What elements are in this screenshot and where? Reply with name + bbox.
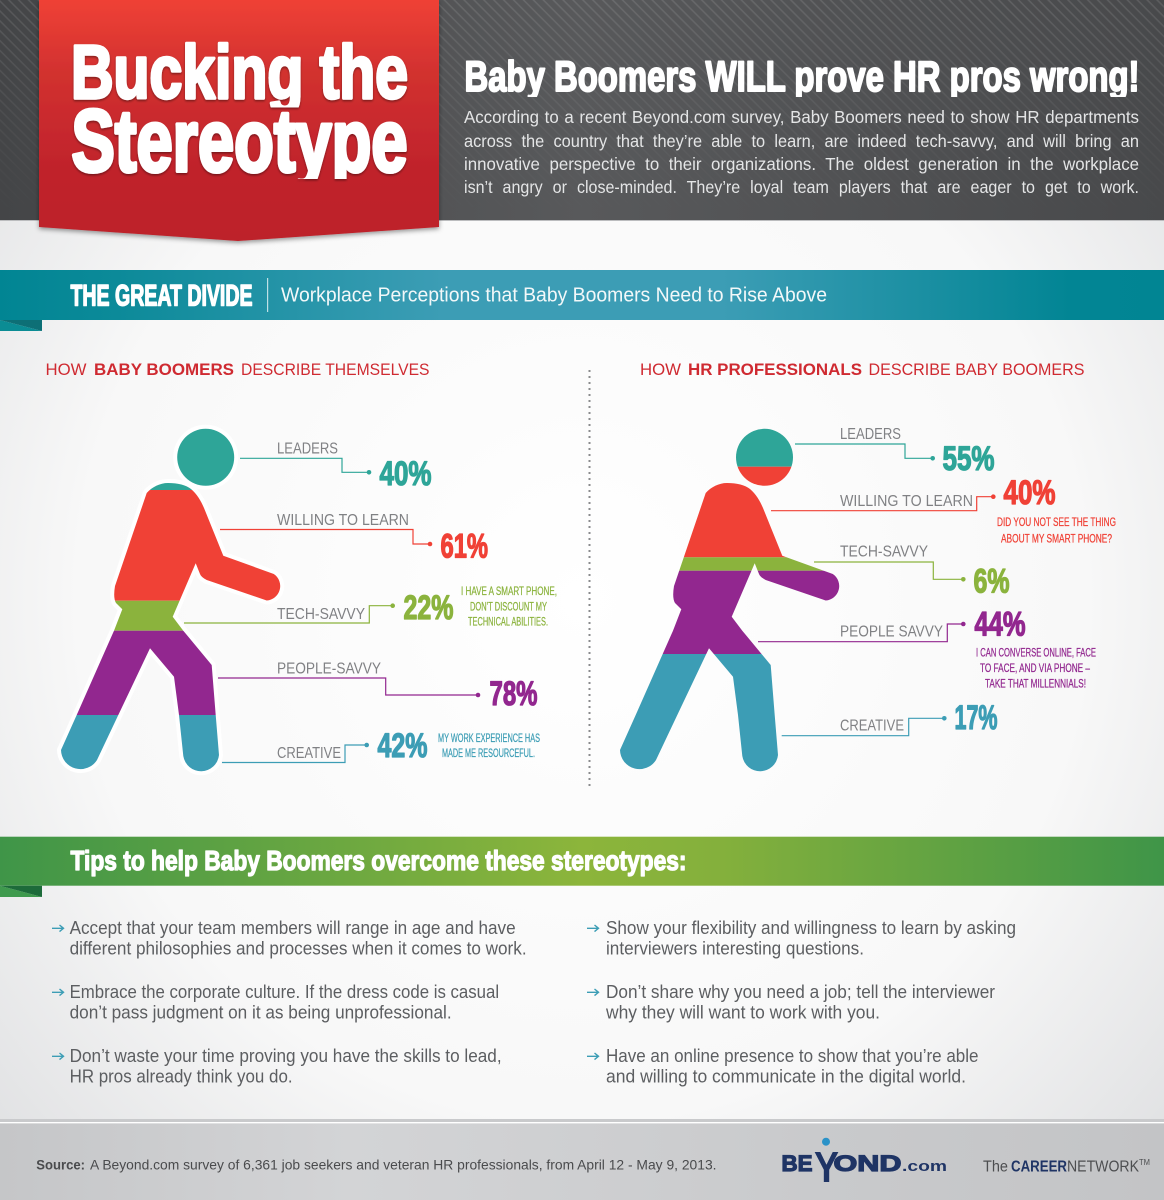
- callout: willing to learn 61%: 61%: [440, 527, 488, 565]
- callout: tech-savvy 22%: I HAVE A SMART PHONE,: [461, 584, 557, 598]
- tip 1: Accept that your team members will range in age and have: [70, 917, 516, 938]
- intro paragraph: innovative perspective to their organizations. The oldest generation in the workplace: [464, 154, 1139, 174]
- tips heading: Tips to help Baby Boomers overcome these stereotypes:: [70, 845, 686, 876]
- callout: willing to learn 40%: WILLING TO LEARN: [840, 493, 973, 510]
- logo: Beyond.com: OND: [834, 1151, 902, 1176]
- tip 2: [52, 981, 499, 1022]
- callout: creative 42%: MY WORK EXPERIENCE HAS: [438, 731, 540, 745]
- tip 6: and willing to communicate in the digital world.: [606, 1065, 966, 1086]
- callout: tech-savvy 22%: TECHNICAL ABILITIES.: [468, 615, 548, 629]
- left figure: boomers self-description: [57, 428, 280, 773]
- callout: people savvy 44%: I CAN CONVERSE ONLINE, FACE: [976, 646, 1096, 660]
- callout: willing to learn 40%: 40%: [1004, 474, 1056, 512]
- callout: tech-savvy 22%: 22%: [404, 589, 454, 627]
- callout: creative 42%: CREATIVE: [277, 745, 341, 762]
- tip 6: Have an online presence to show that you’re able: [606, 1045, 978, 1066]
- callout: people savvy 44%: 44%: [974, 606, 1026, 644]
- callout: creative 42%: MADE ME RESOURCEFUL.: [442, 746, 535, 760]
- callout: leaders 40%: [240, 440, 432, 493]
- callout: people savvy 44%: PEOPLE SAVVY: [840, 624, 943, 641]
- right figure: HR description: [620, 428, 840, 772]
- intro paragraph: According to a recent Beyond.com survey, Baby Boomers need to show HR departments: [464, 107, 1139, 127]
- tip 3: HR pros already think you do.: [70, 1065, 293, 1086]
- callout: people savvy 44%: TO FACE, AND VIA PHONE –: [980, 661, 1090, 675]
- callout: leaders 55%: [795, 426, 994, 478]
- banner subheading: Workplace Perceptions that Baby Boomers Need to Rise Above: [281, 284, 827, 306]
- source note: A Beyond.com survey of 6,361 job seekers and veteran HR professionals, from April 12 - May 9, 2013.: [90, 1156, 716, 1172]
- logo: Beyond.com: [782, 1138, 947, 1192]
- callout: willing to learn 61%: WILLING TO LEARN: [277, 512, 409, 529]
- callout: leaders 55%: LEADERS: [840, 426, 901, 443]
- callout: people savvy 44%: [758, 606, 1096, 691]
- callout: people savvy 44%: TAKE THAT MILLENNIALS!: [985, 677, 1086, 691]
- footer band: [0, 1119, 1164, 1200]
- tip 5: Don’t share why you need a job; tell the interviewer: [606, 981, 995, 1002]
- tip 1: [52, 917, 527, 958]
- callout: creative 17%: 17%: [954, 699, 998, 737]
- callout: creative 17%: [782, 699, 998, 737]
- callout: willing to learn 40%: ABOUT MY SMART PHONE?: [1001, 532, 1112, 546]
- callout: people-savvy 78%: [218, 660, 538, 713]
- logo: The Career Network: NETWORK: [1067, 1159, 1140, 1176]
- tip 5: [587, 981, 995, 1022]
- callout: leaders 40%: 40%: [380, 455, 432, 493]
- banner heading: THE GREAT DIVIDE: [70, 280, 252, 312]
- callout: tech-savvy 22%: TECH-SAVVY: [277, 606, 365, 623]
- right callouts: [758, 426, 1116, 737]
- callout: tech-savvy 6%: TECH-SAVVY: [840, 544, 928, 561]
- tip 3: Don’t waste your time proving you have the skills to lead,: [70, 1045, 502, 1066]
- right column heading: HOW: [640, 360, 681, 379]
- intro paragraph: across the country that they’re able to learn, are indeed tech-savvy, and will bring an: [464, 131, 1139, 151]
- logo: The Career Network: TM: [1139, 1158, 1150, 1167]
- title: [70, 42, 408, 182]
- callout: people-savvy 78%: 78%: [490, 675, 538, 713]
- callout: tech-savvy 22%: [184, 584, 557, 629]
- callout: creative 42%: 42%: [378, 727, 428, 765]
- logo: Beyond.com: BE: [782, 1151, 812, 1176]
- callout: leaders 40%: LEADERS: [277, 440, 338, 457]
- left column heading: HOW: [46, 360, 86, 379]
- title: Stereotype: [72, 91, 408, 190]
- callout: tech-savvy 6%: [814, 544, 1010, 601]
- left column heading: BABY BOOMERS: [94, 360, 234, 379]
- logo: The Career Network: CAREER: [1011, 1159, 1067, 1176]
- callout: people-savvy 78%: PEOPLE-SAVVY: [277, 660, 381, 677]
- header band: [0, 0, 1164, 221]
- tips right column: [587, 917, 1016, 1086]
- logo: Beyond.com: Y: [814, 1143, 839, 1192]
- tip 2: don’t pass judgment on it as being unprofessional.: [70, 1001, 452, 1022]
- section banner: tips: [0, 837, 1164, 897]
- logo: Beyond.com: .com: [902, 1159, 947, 1175]
- logo: The Career Network: [983, 1158, 1150, 1176]
- callout: leaders 55%: 55%: [942, 440, 994, 478]
- right column heading: [640, 360, 1084, 379]
- callout: tech-savvy 6%: 6%: [974, 563, 1010, 601]
- left column heading: DESCRIBE THEMSELVES: [241, 360, 430, 379]
- tip 4: [587, 917, 1016, 958]
- tip 2: Embrace the corporate culture. If the dress code is casual: [70, 981, 499, 1002]
- tips left column: [52, 917, 527, 1086]
- right column heading: DESCRIBE BABY BOOMERS: [868, 360, 1084, 379]
- callout: willing to learn 61%: [220, 512, 488, 565]
- left column heading: [46, 360, 430, 379]
- right column heading: HR PROFESSIONALS: [688, 360, 862, 379]
- logo: The Career Network: The: [983, 1159, 1008, 1176]
- source note: Source:: [36, 1156, 85, 1172]
- title: Bucking the: [71, 30, 408, 114]
- section banner: the great divide: [0, 270, 1164, 331]
- intro paragraph: [464, 107, 1139, 197]
- callout: tech-savvy 22%: DON’T DISCOUNT MY: [470, 600, 547, 614]
- callout: willing to learn 40%: [771, 474, 1116, 546]
- red title ribbon: [39, 0, 439, 241]
- tip 5: why they will want to work with you.: [605, 1001, 880, 1022]
- tip 3: [52, 1045, 502, 1086]
- left callouts: [184, 440, 557, 765]
- callout: creative 42%: [222, 727, 540, 765]
- tip 6: [587, 1045, 978, 1086]
- tip 4: interviewers interesting questions.: [606, 937, 864, 958]
- callout: creative 17%: CREATIVE: [840, 718, 904, 735]
- tip 1: different philosophies and processes when it comes to work.: [70, 937, 527, 958]
- tip 4: Show your flexibility and willingness to learn by asking: [606, 917, 1016, 938]
